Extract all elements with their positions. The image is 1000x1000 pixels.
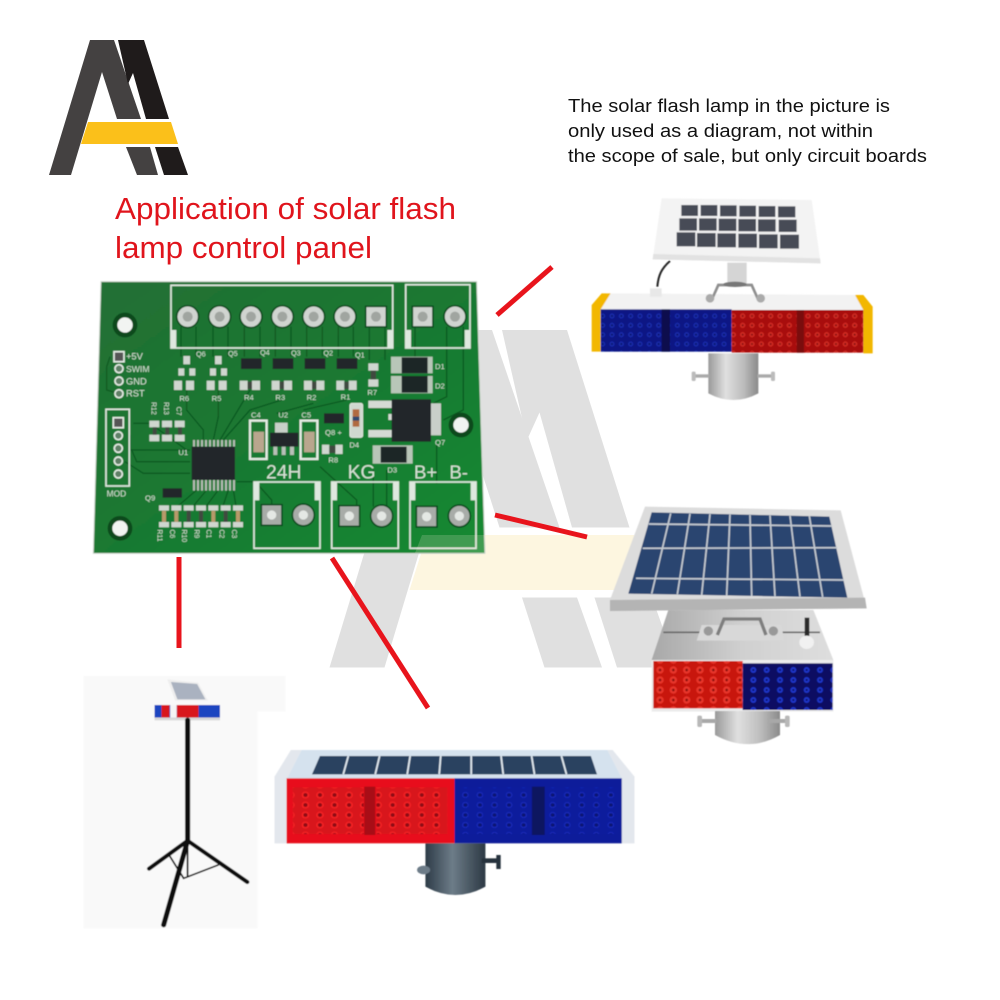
solar panel [610, 507, 867, 611]
silkscreen labels: C6 [168, 529, 175, 538]
silkscreen labels: SWIM [126, 364, 150, 374]
mini lamp head [155, 679, 220, 720]
silkscreen labels: D2 [435, 382, 445, 391]
silkscreen labels: Q2 [323, 349, 333, 358]
silkscreen labels: C1 [205, 529, 212, 538]
silkscreen labels: C4 [251, 411, 262, 420]
silkscreen labels: R1 [341, 392, 350, 401]
silkscreen labels: R7 [367, 388, 377, 397]
small pads and resistors [149, 356, 378, 527]
silkscreen labels: Q9 [145, 494, 155, 503]
silkscreen labels: U1 [178, 448, 188, 457]
diode D4 [350, 403, 363, 437]
silkscreen labels: KG [348, 462, 376, 483]
silkscreen labels: Q4 [260, 348, 270, 357]
silkscreen labels: R8 [328, 456, 338, 465]
watermark tint over board [415, 535, 485, 553]
silkscreen labels: R3 [275, 393, 285, 402]
solar panel [653, 198, 821, 263]
silkscreen labels: C5 [301, 411, 311, 420]
silkscreen labels: Q3 [291, 349, 301, 358]
tripod-mounted lamp [84, 676, 285, 928]
silkscreen labels: Q5 [228, 349, 238, 358]
logo [49, 40, 188, 175]
silkscreen labels: R11 [155, 529, 162, 542]
tripod stand [149, 720, 247, 925]
disclaimer note: The solar flash lamp in the picture is [568, 95, 890, 116]
silkscreen labels: R9 [193, 529, 200, 538]
mounting holes [110, 315, 471, 538]
connector outlines [106, 285, 476, 548]
silkscreen labels: 24H [266, 462, 301, 483]
silkscreen labels: +5V [126, 351, 144, 361]
silkscreen labels [107, 348, 468, 542]
pole with wing bolts [697, 711, 790, 744]
silkscreen labels: Q1 [355, 350, 365, 359]
silkscreen labels: R2 [307, 393, 316, 402]
silkscreen labels: B+ [414, 461, 437, 482]
large red and blue lamp [275, 750, 634, 895]
watermark logo [330, 330, 677, 668]
through-hole pads [177, 306, 470, 527]
silkscreen labels: R12 [150, 402, 157, 415]
silkscreen labels: C2 [217, 529, 224, 538]
disclaimer note: the scope of sale, but only circuit boards [568, 145, 927, 166]
microcontroller U1 [192, 440, 235, 491]
transistors [163, 358, 357, 498]
silkscreen labels: R5 [212, 394, 221, 403]
lamp: square with large panel [610, 507, 867, 744]
silkscreen labels: GND [126, 376, 147, 386]
silkscreen labels: Q8 + [325, 428, 342, 437]
connector lines [179, 267, 587, 708]
connector tabs [171, 330, 476, 500]
silkscreen labels: Q7 [435, 438, 445, 447]
silkscreen labels: D4 [349, 441, 360, 450]
silkscreen labels: D3 [387, 465, 397, 474]
silkscreen labels: D1 [435, 362, 445, 371]
silkscreen labels: C3 [230, 529, 237, 538]
heading: Application of solar flash [115, 191, 456, 226]
circuit board [93, 282, 485, 553]
lamp body [275, 750, 634, 843]
pole and bolts [417, 843, 501, 895]
lamp body [592, 282, 873, 353]
silkscreen labels: R6 [179, 394, 189, 403]
photo backdrop [84, 676, 285, 928]
silkscreen labels: U2 [278, 411, 288, 420]
silkscreen labels: RST [126, 389, 145, 399]
heading: lamp control panel [115, 230, 372, 265]
lamp: wide yellow-capped with small panel [592, 198, 873, 400]
lamp body [652, 610, 833, 712]
silkscreen labels: Q6 [196, 350, 206, 359]
regulator U2 and capacitors [250, 421, 317, 459]
mount stem and cable [657, 261, 747, 287]
power MOSFET Q7 [368, 399, 441, 442]
silkscreen labels: R10 [180, 529, 187, 542]
silkscreen labels: R4 [244, 393, 255, 402]
silkscreen labels: MOD [107, 489, 126, 499]
silkscreen labels: B- [449, 461, 468, 482]
silkscreen labels: R13 [162, 402, 169, 415]
copper traces [107, 327, 463, 510]
disclaimer note: only used as a diagram, not within [568, 120, 873, 141]
diodes D1 D2 D3 [373, 357, 433, 464]
pole with wing bolts [692, 353, 775, 400]
header pads [113, 352, 124, 478]
silkscreen labels: C7 [175, 407, 182, 416]
